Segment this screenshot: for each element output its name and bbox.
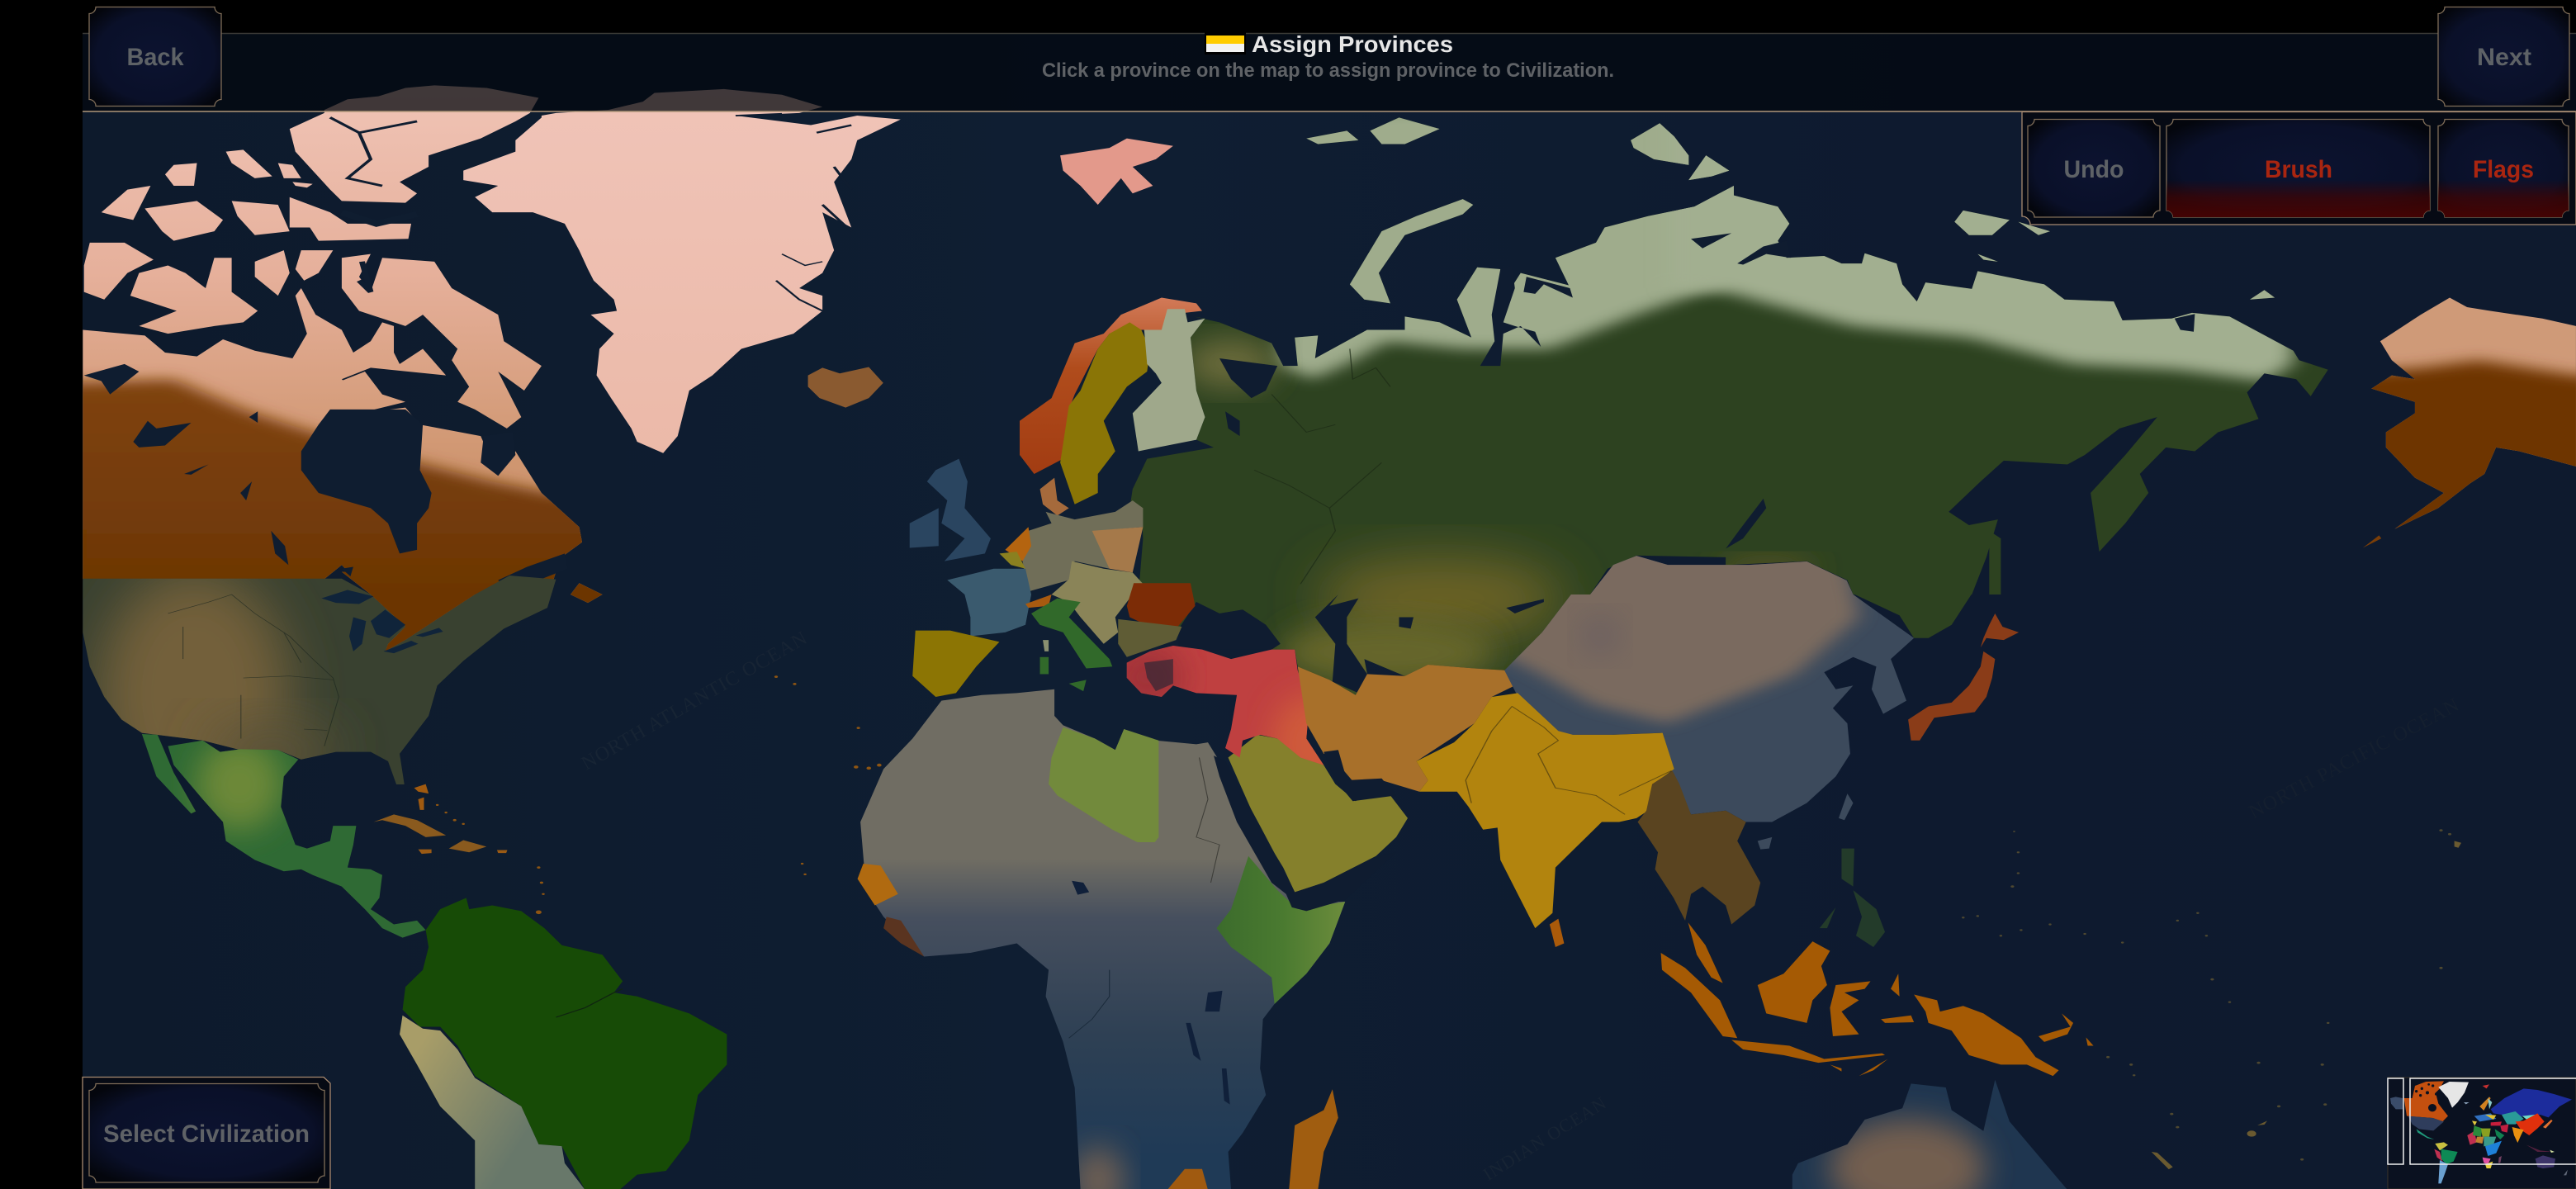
- button: Undo: [2028, 119, 2160, 217]
- country: Romania: [1127, 583, 1196, 628]
- header panel: [83, 31, 2576, 111]
- map: Russia and northern Eurasia: [1131, 117, 2328, 695]
- country: Belgium: [999, 552, 1025, 569]
- water: Hudson Bay and Canadian lakes: [84, 364, 567, 591]
- country: USA: [83, 576, 556, 784]
- country: Sri Lanka: [1550, 919, 1564, 947]
- country: Libya: [1049, 727, 1159, 842]
- country: Arabia: [1229, 735, 1408, 892]
- country: Italy: [1031, 599, 1112, 691]
- water: Great Lakes: [321, 590, 443, 653]
- country: Southeast Asia: [1638, 771, 1760, 925]
- flag: yellow and white: [1205, 31, 1246, 54]
- country: Madagascar: [1289, 1089, 1338, 1189]
- region: Canada arctic and mainland: [83, 85, 603, 651]
- country: Mexico and Central America: [142, 734, 426, 938]
- country: Turkey and Levant: [1126, 646, 1324, 765]
- button: Select Civilization: [89, 1083, 324, 1182]
- top black margin: [0, 0, 2576, 33]
- button: Undo: Undo: [2064, 156, 2124, 183]
- country: Poland: [1092, 527, 1143, 572]
- country: Denmark: [1040, 478, 1069, 516]
- minimap viewport frames: [2388, 1078, 2576, 1164]
- country: Liberia: [883, 917, 924, 957]
- title: Assign Provinces: [1252, 31, 1453, 57]
- button: Brush: [2166, 119, 2430, 217]
- island: Aleutian tail: [2363, 535, 2381, 548]
- country: United Kingdom and Ireland: [910, 459, 991, 561]
- subtitle: Click a province on the map to assign province to Civilization.: [1042, 59, 1614, 82]
- country: Switzerland: [1025, 594, 1052, 608]
- button: Back: [89, 7, 221, 106]
- country: China and Mongolia: [1504, 556, 1914, 849]
- button: Back: Back: [127, 44, 184, 71]
- islands: Pacific and Aleutians: [1962, 829, 2461, 1169]
- panel: select civilization: [83, 1077, 330, 1189]
- water: Greenland and Ellesmere fjords: [330, 114, 851, 311]
- button: Next: [2438, 7, 2569, 106]
- borders: [1254, 348, 1390, 584]
- country: South Africa: [1167, 1169, 1208, 1189]
- country: Germany: [1023, 500, 1143, 591]
- country: Netherlands: [1005, 527, 1031, 561]
- region: Amazon and Brazil: [403, 898, 727, 1189]
- region: Alaska: [2371, 297, 2576, 528]
- country: Sweden: [1060, 322, 1150, 504]
- country: Norway: [1020, 297, 1202, 474]
- country: Australia: [1792, 1080, 2067, 1189]
- country: Finland: [1133, 309, 1205, 451]
- region: Andes: [400, 1016, 585, 1189]
- map: Middle East and Asia: [1110, 281, 2576, 1189]
- region: Greenland: [463, 89, 901, 453]
- country: Balkans: [1118, 619, 1181, 657]
- panel: map tools: [2022, 112, 2576, 225]
- minimap: [2388, 1078, 2576, 1189]
- country: Philippines: [1820, 849, 1885, 947]
- ocean label: Indian Ocean: INDIAN OCEAN: [1480, 1092, 1610, 1185]
- minimap countries: [2390, 1081, 2572, 1183]
- map: Europe: [910, 297, 1205, 697]
- button: Brush: Brush: [2265, 156, 2332, 183]
- islands: Caribbean: [373, 675, 882, 914]
- country: Indonesia: [1661, 922, 2094, 1076]
- map: Africa: [857, 689, 1346, 1189]
- ocean label: North Pacific Ocean: NORTH PACIFIC OCEAN: [2246, 694, 2464, 823]
- country: Austria and Hungary: [1052, 561, 1143, 644]
- country: Iran: [1298, 665, 1515, 792]
- button: Select Civilization: Select Civilization: [103, 1120, 310, 1148]
- state borders: [168, 594, 339, 746]
- map: South America: [400, 898, 727, 1189]
- left black margin: [0, 0, 83, 1189]
- country: Japan: [1908, 613, 2019, 741]
- country: India: [1417, 693, 1674, 928]
- button: Flags: [2438, 119, 2569, 217]
- water: Arctic bays and Russian lakes: [1179, 233, 2195, 693]
- country: Ethiopia and Somalia: [1217, 856, 1345, 1004]
- map: Svalbard: [1060, 139, 1173, 205]
- map: North America: [58, 74, 925, 983]
- island: Iceland: [808, 367, 883, 408]
- country: Senegal: [858, 864, 898, 906]
- country: Spain: [912, 631, 999, 697]
- water: Persian Gulf: [1324, 750, 1396, 801]
- button: Next: Next: [2477, 44, 2531, 71]
- water: African lakes: [1072, 881, 1230, 1105]
- region: Africa colour field: [860, 689, 1346, 1189]
- button: Flags: Flags: [2473, 156, 2534, 183]
- ocean label: North Atlantic Ocean: NORTH ATLANTIC OCEAN: [578, 628, 812, 775]
- country: France: [947, 569, 1031, 637]
- river: Amazon: [556, 989, 623, 1017]
- water: Red Sea and Gulf of Aden: [1214, 756, 1396, 911]
